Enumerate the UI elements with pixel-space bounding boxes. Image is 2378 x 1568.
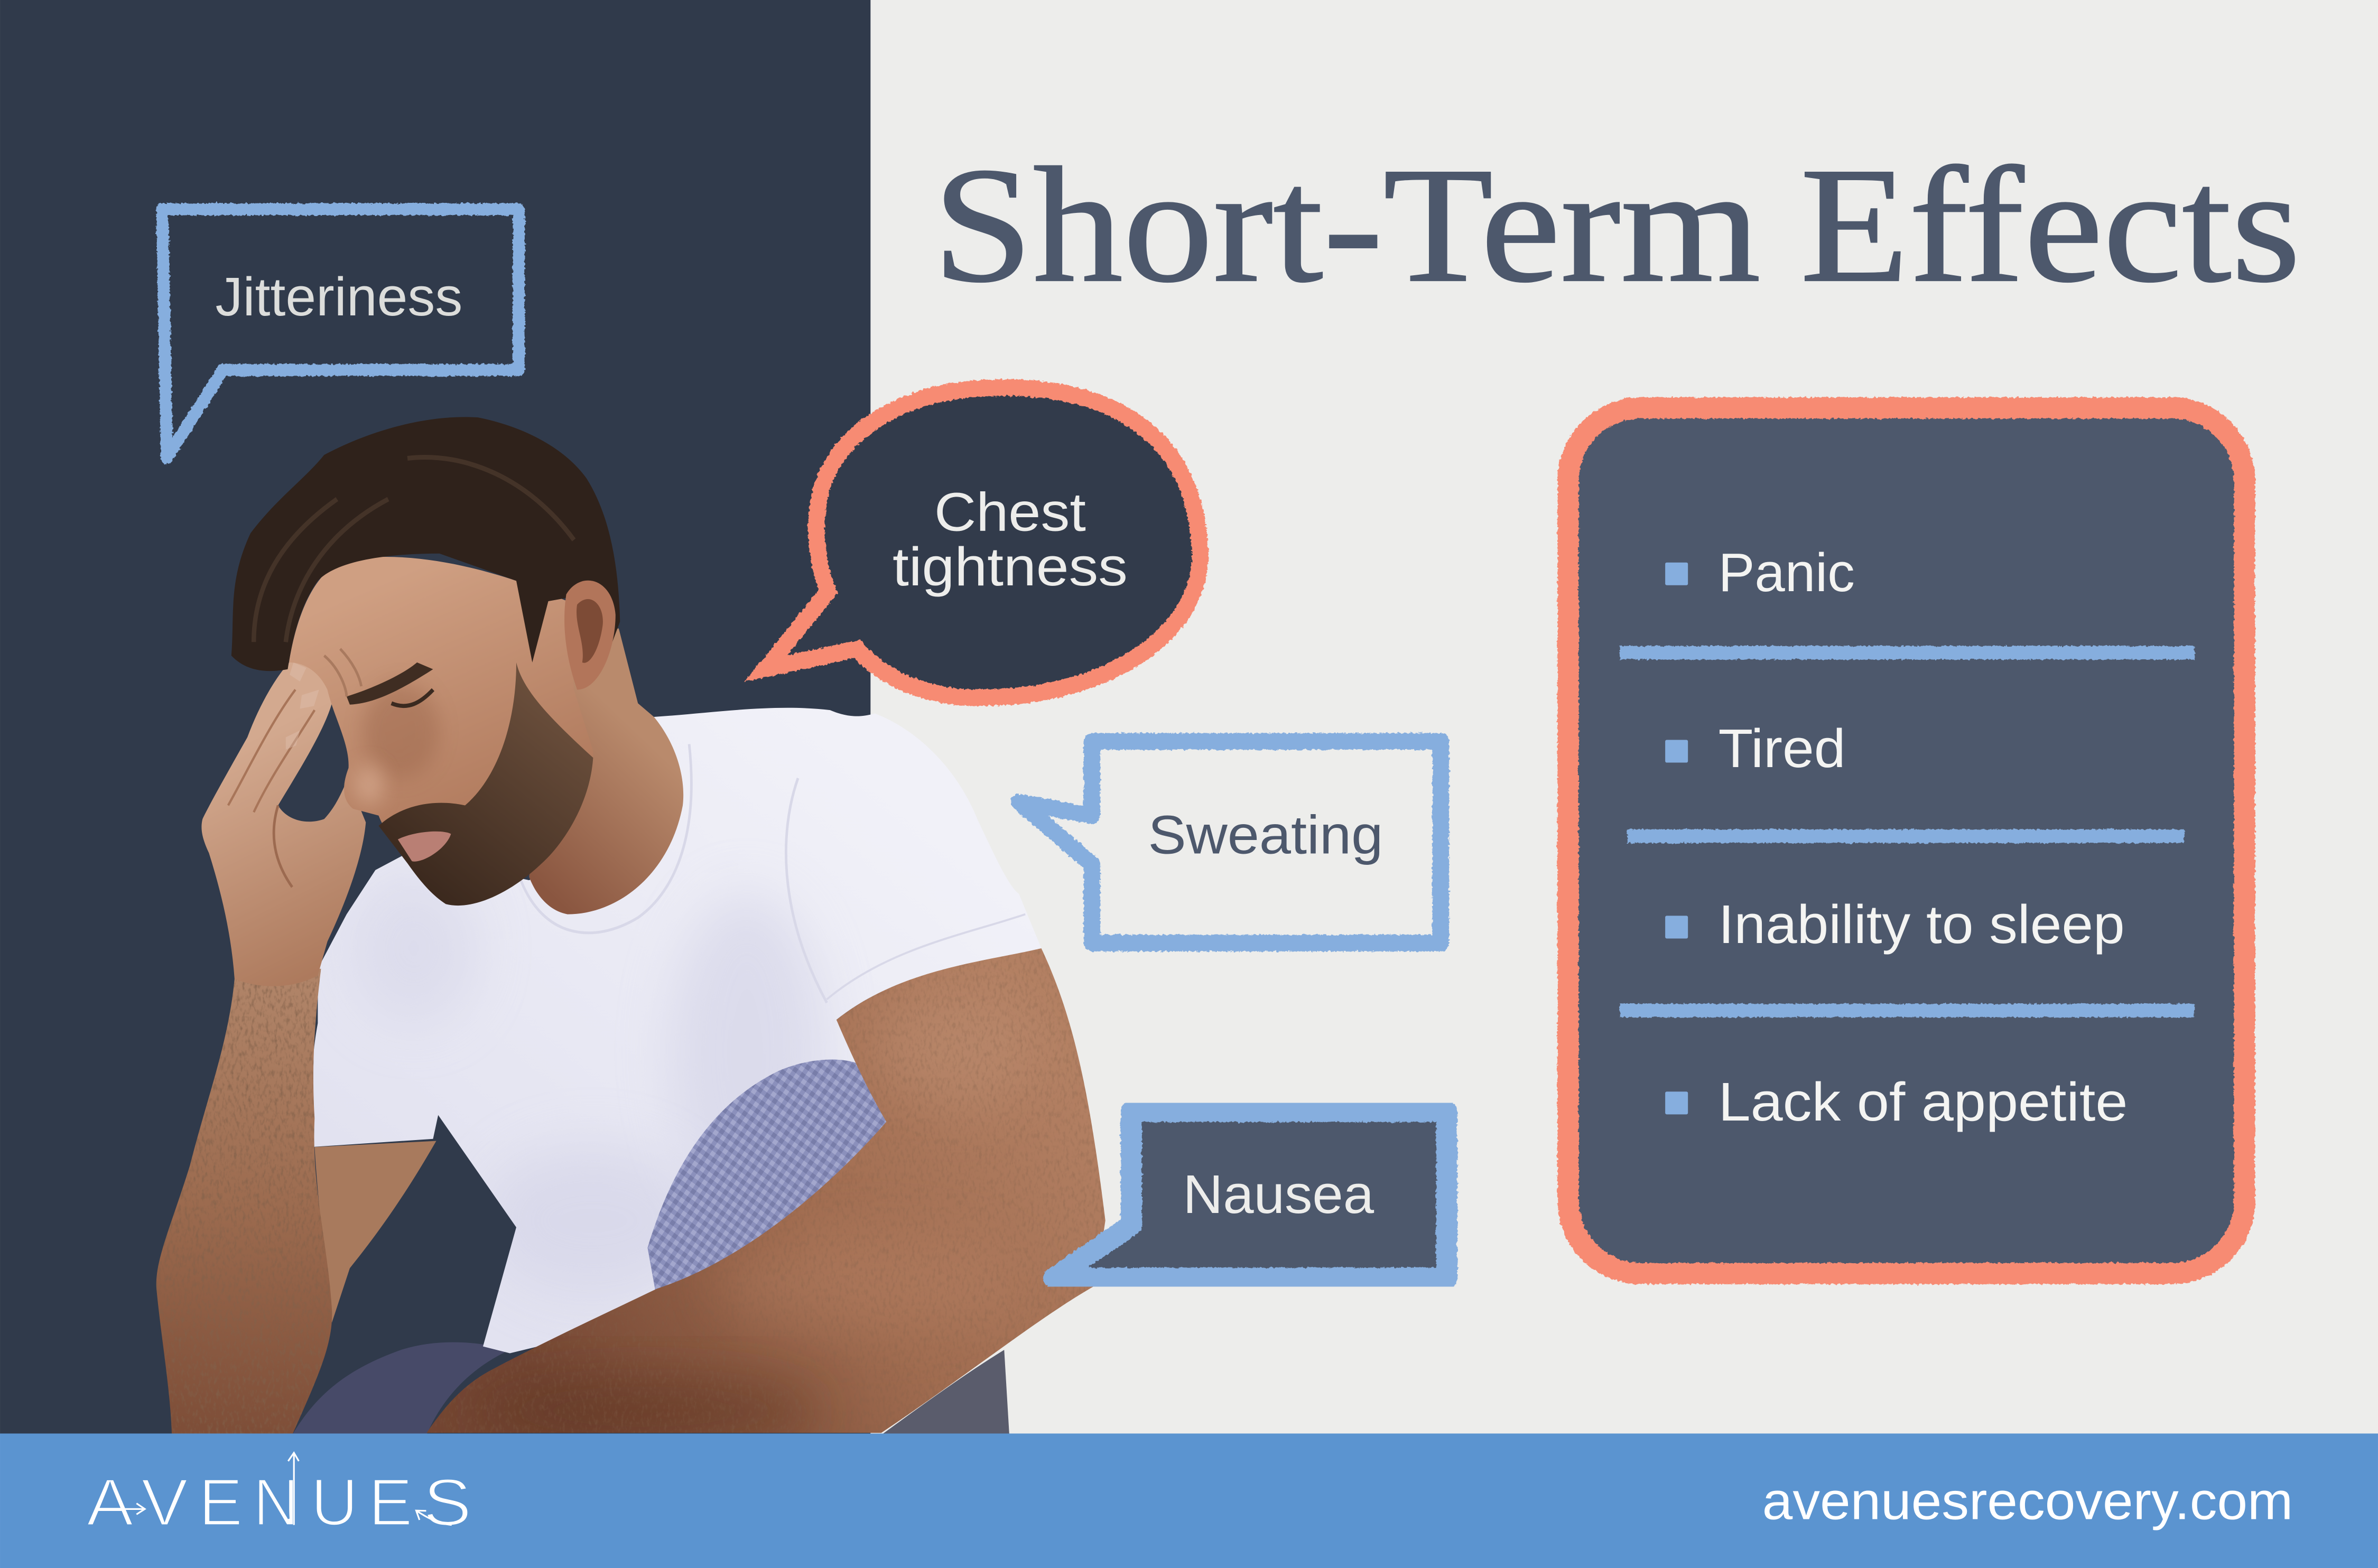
speech bubble: Jitteriness: Jitteriness: [216, 266, 462, 327]
list item: Lack of appetite: Lack of appetite: [1719, 1071, 2128, 1132]
logo arrows: [96, 1453, 452, 1525]
beard and moustache: [378, 662, 593, 906]
forehead wrinkles: [324, 649, 361, 696]
hair: [231, 417, 620, 671]
divider 1: [1620, 646, 2195, 659]
divider 2: [1627, 829, 2184, 843]
logo: AVENUES: V: [141, 1465, 188, 1539]
ear: [564, 581, 616, 689]
panel: symptom list: [1568, 408, 2244, 1274]
closed eye: [392, 689, 433, 706]
inner ear: [577, 599, 603, 663]
knee in patterned pants: [647, 1060, 900, 1336]
speech bubble: Chest tightness: tightness: [893, 536, 1128, 597]
panel: dark left column: [0, 0, 870, 1434]
inner upper arm: [314, 1141, 436, 1323]
lips: [398, 832, 451, 862]
speech bubble: Chest tightness: [766, 388, 1200, 698]
photo: man holding his head: [151, 417, 1112, 1445]
list item: Tired: [1665, 717, 1846, 779]
left forearm: [151, 969, 337, 1439]
lower pants: [292, 1342, 1009, 1435]
logo: AVENUES: E: [199, 1465, 243, 1539]
speech bubble: Sweating: Sweating: [1148, 804, 1383, 865]
logo: AVENUES: U: [311, 1465, 358, 1539]
neck: [516, 629, 683, 914]
speech bubble: Jitteriness: [162, 209, 519, 458]
website url: avenuesrecovery.com: [1762, 1472, 2293, 1531]
right arm crossing the knee: [426, 948, 1112, 1445]
speech bubble: Nausea: Nausea: [1183, 1163, 1374, 1225]
head: [231, 417, 620, 906]
speech bubble: Nausea: [1054, 1112, 1447, 1278]
list item: Tired: Tired: [1719, 717, 1846, 779]
white t-shirt: [310, 708, 1042, 1354]
speech bubble: Sweating: [1019, 741, 1441, 943]
eyebrow: [347, 662, 433, 705]
divider 3: [1620, 1004, 2195, 1018]
title: [933, 133, 2301, 316]
logo: AVENUES: N: [253, 1465, 299, 1539]
list item: Inability to sleep: Inability to sleep: [1719, 893, 2125, 955]
face: [289, 557, 593, 904]
logo: AVENUES: E: [368, 1465, 413, 1539]
panel frame: [1568, 408, 2244, 1274]
list item: Panic: Panic: [1719, 542, 1855, 603]
logo: AVENUES: A: [87, 1465, 134, 1539]
logo: AVENUES: [87, 1465, 472, 1539]
title: Short-Term: [933, 133, 1761, 316]
title: Effects: [1800, 133, 2301, 316]
footer bar: [0, 1433, 2378, 1568]
finger nails: [286, 662, 319, 750]
logo: AVENUES: S: [423, 1465, 472, 1539]
facial shading: [355, 683, 440, 804]
hand on forehead: [201, 659, 366, 986]
speech bubble: Chest tightness: Chest: [934, 481, 1086, 542]
